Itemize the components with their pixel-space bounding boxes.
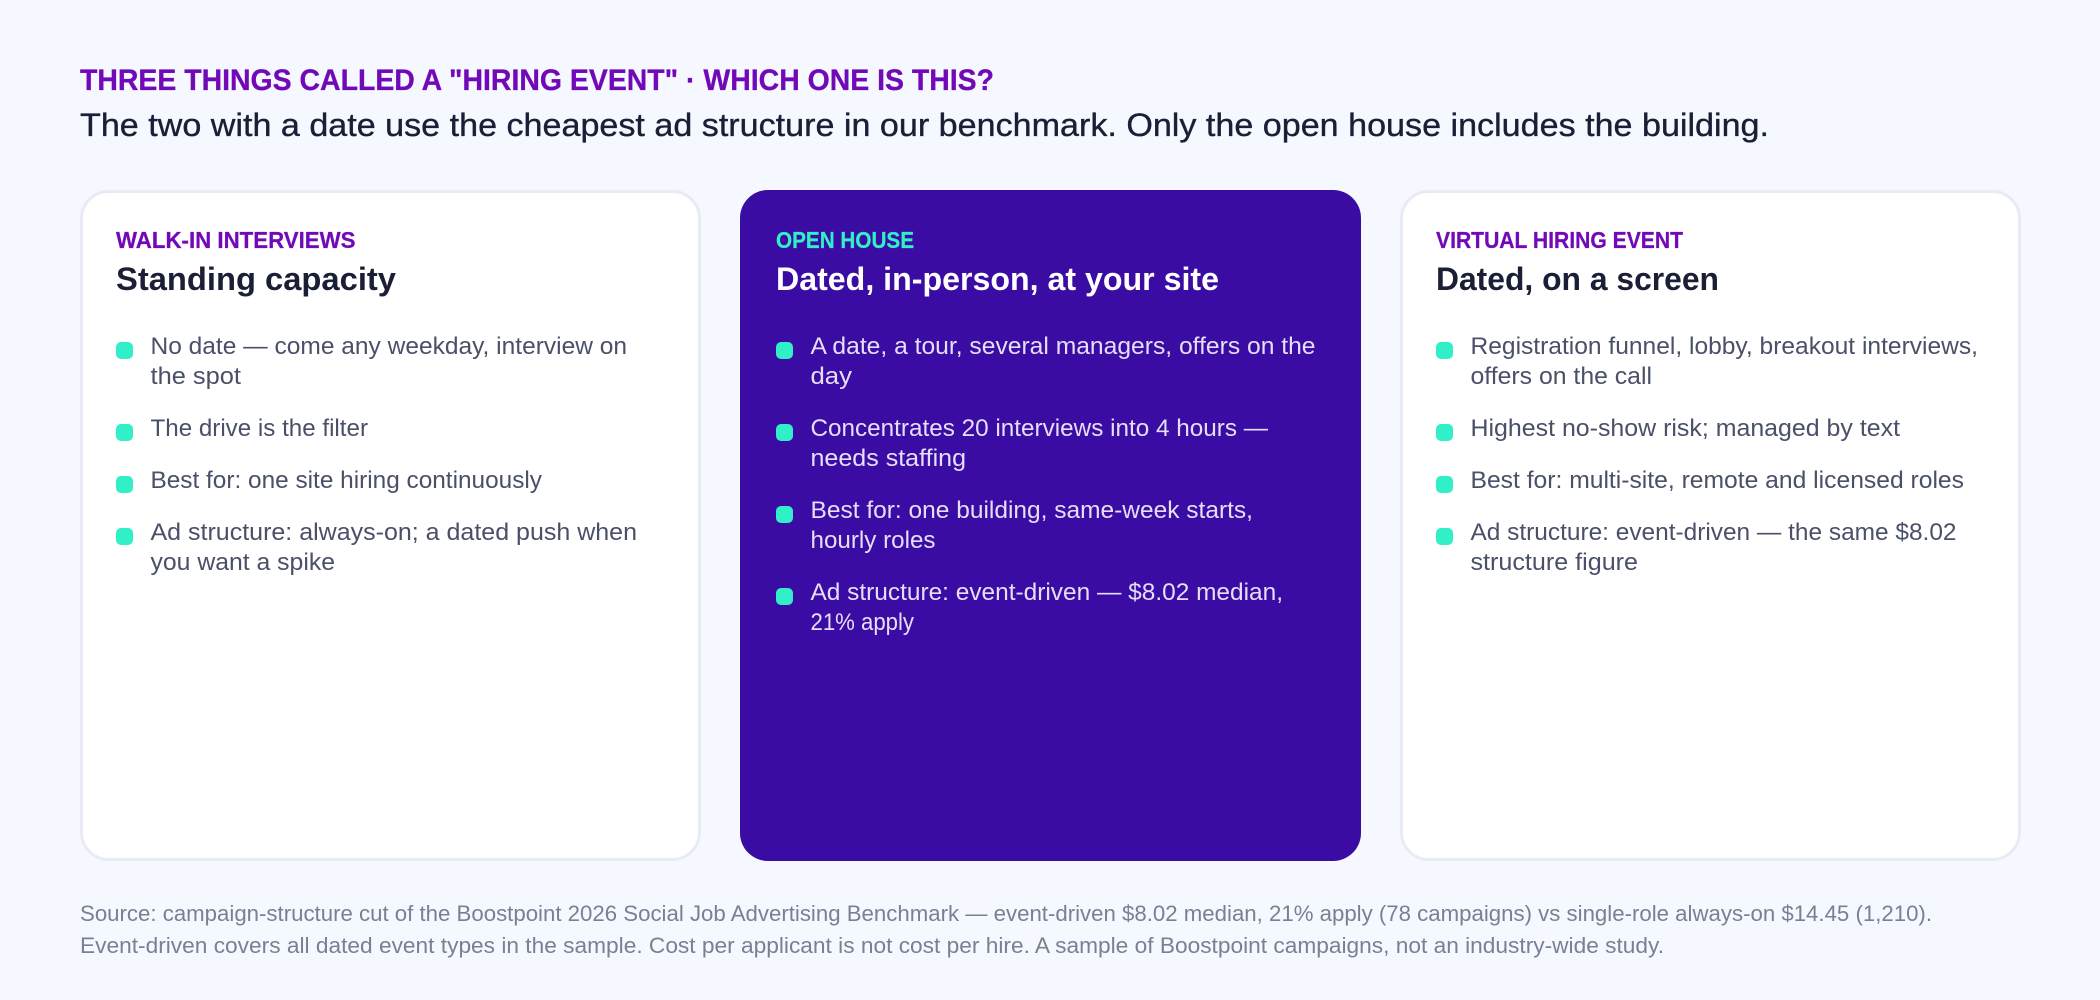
bullet: a date bbox=[776, 333, 1316, 390]
bullet: ad structure bbox=[116, 519, 637, 576]
bullet: best for: Best for: multi-site, remote and licensed roles bbox=[1470, 467, 1964, 494]
bullet: no date: No date — come any weekday, interview on bbox=[150, 333, 627, 360]
bullet: concentrates: Concentrates 20 interviews into 4 hours — bbox=[810, 415, 1268, 442]
bullet: no date: the spot bbox=[150, 363, 241, 390]
bullet: no-show: Highest no-show risk; managed by text bbox=[1470, 415, 1900, 442]
source note bbox=[80, 901, 1932, 958]
eyebrow: walk-in interviews: WALK-IN INTERVIEWS bbox=[116, 227, 356, 253]
bullet: best for: hourly roles bbox=[810, 527, 936, 554]
source note: Event-driven covers all dated event types in the sample. Cost per applicant is not cost per hire. A sample of Boostpoint campaigns, not an industry-wide study. bbox=[80, 933, 1664, 958]
bullet: ad structure: Ad structure: event-driven — $8.02 median, bbox=[810, 579, 1283, 606]
bullet: best for: Best for: one building, same-week starts, bbox=[810, 497, 1253, 524]
bullet: best for: Best for: one site hiring continuously bbox=[150, 467, 543, 494]
bullet: a date: day bbox=[810, 363, 853, 390]
panel: virtual hiring event bbox=[1402, 192, 2020, 860]
bullet: ad structure bbox=[1436, 519, 1956, 576]
bullet: ad structure: you want a spike bbox=[150, 549, 335, 576]
bullet: registration: Registration funnel, lobby, breakout interviews, bbox=[1470, 333, 1978, 360]
bullet: ad structure: Ad structure: always-on; a dated push when bbox=[150, 519, 637, 546]
bullet: registration: offers on the call bbox=[1470, 363, 1652, 390]
bullet: ad structure bbox=[776, 579, 1283, 636]
bullet: no date bbox=[116, 333, 627, 390]
subtitle: The two with a date use the cheapest ad structure in our benchmark. Only the open house includes the building. bbox=[80, 107, 1769, 143]
panel: open house bbox=[740, 190, 1361, 861]
heading: standing capacity: Standing capacity bbox=[116, 261, 396, 297]
bullet: ad structure: Ad structure: event-driven — the same $8.02 bbox=[1470, 519, 1956, 546]
heading: dated on a screen: Dated, on a screen bbox=[1436, 261, 1719, 297]
title: THREE THINGS CALLED A "HIRING EVENT" · WHICH ONE IS THIS? bbox=[80, 64, 994, 97]
bullet: a date: A date, a tour, several managers, offers on the bbox=[810, 333, 1316, 360]
source note: Source: campaign-structure cut of the Boostpoint 2026 Social Job Advertising Benchmark — event-driven $8.02 median, 21% apply (78 campaigns) vs single-role always-on $14.45 (1,210). bbox=[80, 901, 1932, 926]
bullet: ad structure: structure figure bbox=[1470, 549, 1638, 576]
eyebrow: virtual hiring event: VIRTUAL HIRING EVENT bbox=[1436, 227, 1684, 253]
bullet: registration bbox=[1436, 333, 1978, 390]
eyebrow: open house: OPEN HOUSE bbox=[776, 227, 914, 253]
bullet: best for bbox=[776, 497, 1253, 554]
panel: walk-in interviews bbox=[82, 192, 700, 860]
bullet: the drive: The drive is the filter bbox=[150, 415, 368, 442]
heading: dated in-person: Dated, in-person, at your site bbox=[776, 261, 1219, 297]
bullet: concentrates: needs staffing bbox=[810, 445, 966, 472]
bullet: ad structure: 21% apply bbox=[810, 609, 915, 636]
bullet: concentrates bbox=[776, 415, 1268, 472]
